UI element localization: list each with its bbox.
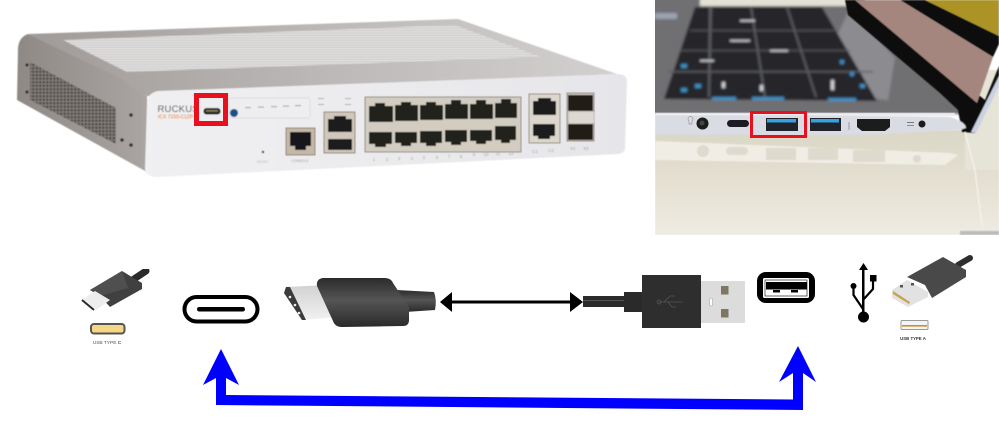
twelve rj45 ports	[365, 97, 521, 152]
uplink rj45 ports	[529, 94, 560, 143]
port numbers: 12	[508, 151, 514, 156]
switch top face	[28, 19, 617, 96]
port numbers: 3	[398, 156, 401, 161]
console rj45 port	[286, 128, 315, 155]
network switch photo: CONSOLE	[291, 159, 309, 163]
management and usb ports	[324, 112, 355, 153]
port numbers: 1	[373, 157, 376, 162]
table highlight line	[965, 132, 982, 226]
port numbers: 4	[411, 156, 414, 161]
switch left side	[17, 34, 147, 172]
cable stub	[396, 290, 436, 312]
small usb c port icon	[91, 324, 124, 334]
metal tip	[284, 285, 340, 320]
port numbers: C1	[532, 149, 538, 154]
power led and jack	[918, 120, 926, 128]
usb a port symbol	[757, 272, 815, 303]
port numbers: 2	[386, 157, 389, 162]
side vent holes	[30, 62, 116, 144]
port numbers: X1	[570, 146, 576, 151]
hdmi port	[857, 119, 890, 131]
port numbers: 6	[436, 155, 439, 160]
status panel	[229, 98, 310, 118]
port numbers: 9	[473, 152, 476, 157]
network switch photo: ICX 7150-C12P	[158, 114, 194, 120]
screen bezel	[845, 0, 999, 133]
switch top vent	[63, 25, 541, 72]
large usb c plug	[284, 278, 436, 327]
usb trident symbol	[850, 263, 876, 322]
plug body	[317, 278, 409, 327]
blurred foreground object	[700, 0, 854, 6]
network switch photo: RESET	[257, 160, 270, 164]
usb c port	[727, 120, 749, 127]
small usb a plug illustration	[892, 257, 970, 307]
sfp ports	[567, 93, 594, 141]
port numbers: 11	[496, 151, 501, 156]
port numbers: 10	[483, 152, 489, 157]
network switch photo	[17, 19, 627, 177]
metal shell	[701, 281, 745, 323]
usb a port second	[810, 118, 841, 131]
small usb c plug illustration	[82, 271, 146, 310]
audio jack	[696, 118, 708, 130]
port numbers: C2	[548, 148, 554, 153]
usb type a label: USB TYPE A	[900, 336, 926, 341]
laptop silver side	[655, 113, 966, 135]
laptop photo	[650, 0, 999, 235]
port numbers	[373, 146, 589, 162]
black double arrow	[440, 292, 583, 312]
keyboard	[664, 7, 877, 101]
port numbers: 5	[423, 155, 426, 160]
port numbers: X2	[583, 146, 589, 151]
laptop deck	[650, 0, 965, 114]
right silver lid edge	[971, 76, 999, 133]
large usb a plug	[583, 275, 745, 328]
laptop photo: HDMI	[847, 122, 851, 130]
small usb a port icon	[901, 320, 928, 330]
table surface	[655, 130, 999, 235]
switch front panel	[145, 74, 627, 177]
usb type c label: USB TYPE C	[93, 340, 122, 346]
reflection	[655, 141, 958, 165]
laptop screen	[855, 0, 993, 103]
usb c port symbol	[184, 297, 258, 322]
brand text: RUCKUS	[158, 104, 199, 115]
port numbers: 7	[448, 154, 451, 159]
plug body with usb symbol	[642, 275, 701, 328]
red highlight box on switch	[196, 96, 226, 124]
usb c console port	[204, 108, 220, 114]
red highlight box on laptop	[752, 112, 806, 136]
blue connection arrow	[203, 346, 816, 410]
usb a port highlighted	[766, 118, 798, 131]
usb cable	[583, 296, 625, 307]
port numbers: 8	[460, 154, 463, 159]
